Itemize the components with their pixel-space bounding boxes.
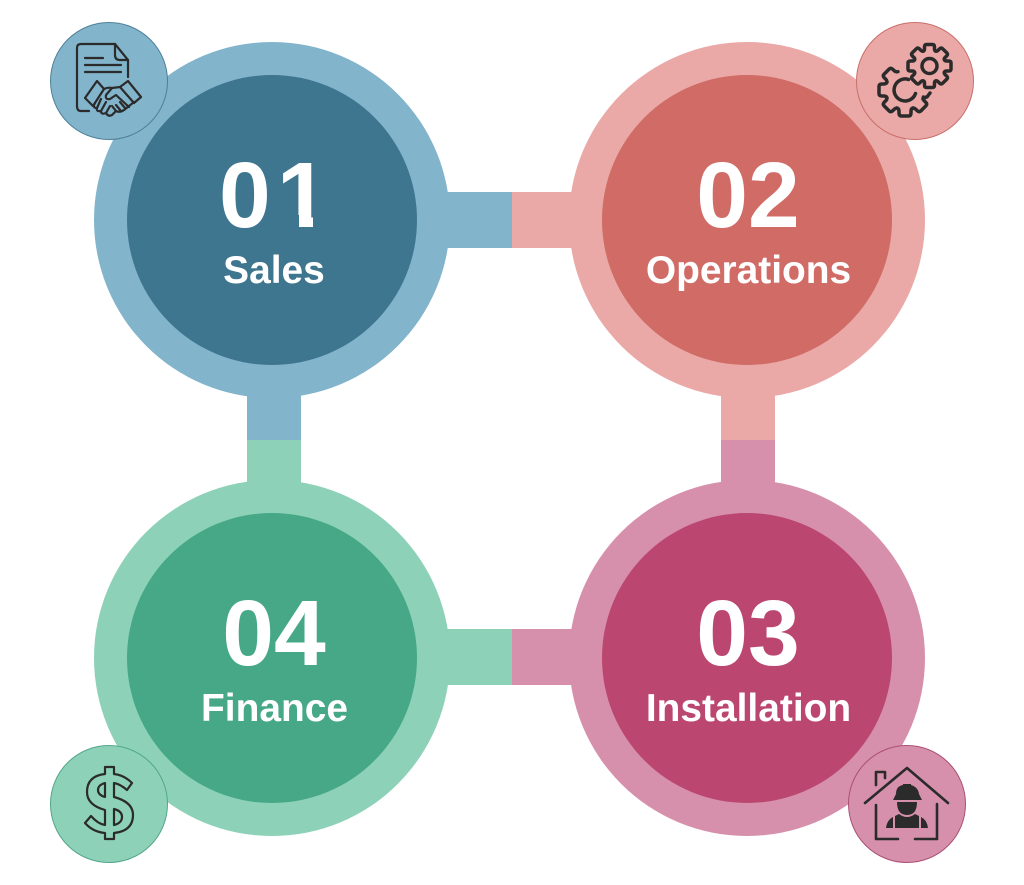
small gear [908,44,951,88]
panel: 04 finance [94,480,450,836]
connector: finance to sales [247,380,301,500]
panel: 03 installation [569,480,925,836]
number 02: 02 [696,143,800,247]
icon: gears [856,22,974,140]
panel: 01 sales [94,42,450,398]
large gear [879,66,930,116]
label installation: Installation [646,687,851,730]
panel: 02 operations [569,42,925,398]
number 04: 04 [222,581,326,685]
number 03: 03 [696,581,800,685]
label operations: Operations [646,249,851,292]
connector: sales to operations [430,192,592,248]
icon: contract and handshake [50,22,168,140]
connector: installation to finance [430,629,592,685]
label finance: Finance [201,687,348,730]
label sales: Sales [223,249,325,292]
connector: operations to installation [721,380,775,500]
number 01: 01 [219,143,328,247]
icon: dollar sign [50,746,168,862]
icon: house with construction worker [848,746,966,862]
